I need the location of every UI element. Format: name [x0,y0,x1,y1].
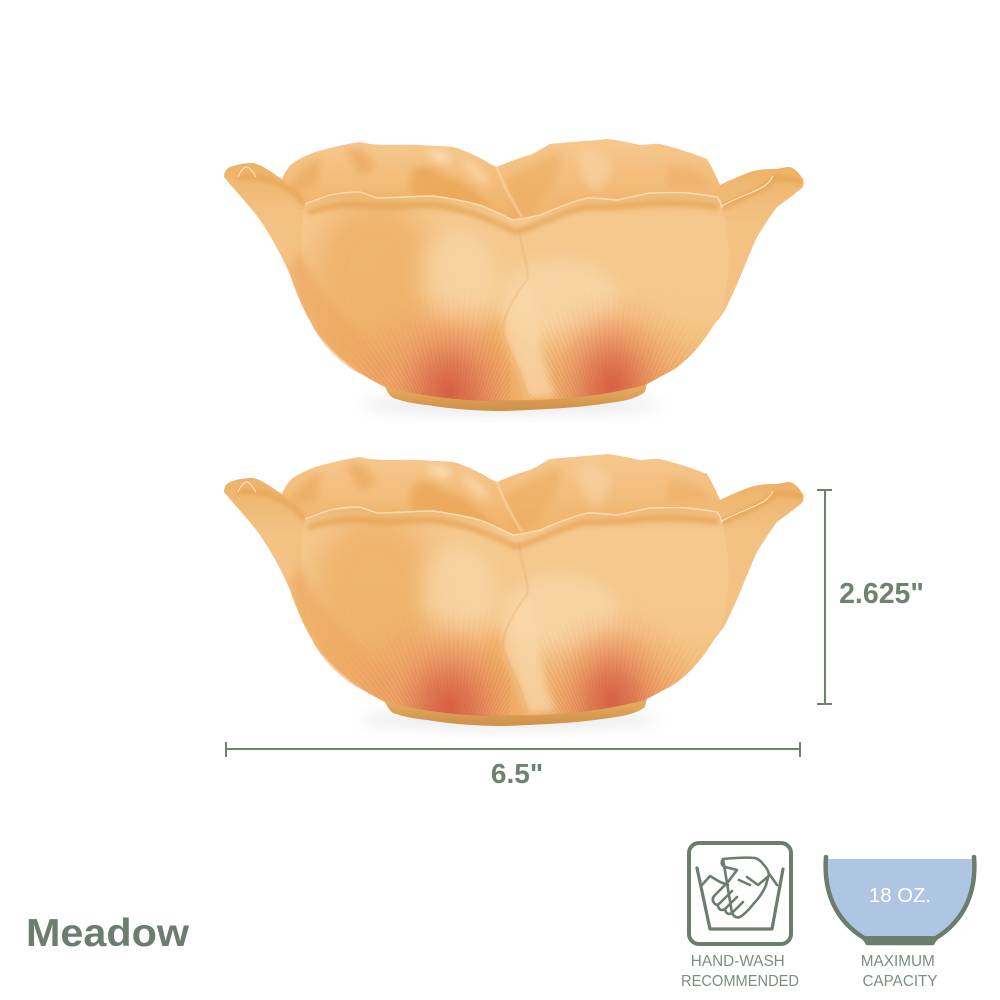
label: capacity: CAPACITY [862,973,938,990]
icon: hand-wash [689,843,791,944]
capacity fill [826,859,974,938]
label: hand-wash: RECOMMENDED [681,973,799,990]
bowl: bottom [224,454,803,900]
icon: capacity bowl [826,857,974,945]
label: hand-wash: HAND-WASH [691,953,785,970]
width label: 6.5" [491,758,543,789]
height label: 2.625" [839,578,924,610]
bowl image: bottom [224,454,803,900]
width dimension bracket [226,742,800,757]
label: capacity: MAXIMUM [861,953,935,970]
capacity outline [826,857,974,943]
capacity foot [862,936,938,945]
capacity value: 18 OZ. [869,885,931,907]
bowl image: top [224,139,803,585]
collection name: Meadow [26,912,190,955]
bowl shadow: top [360,395,660,415]
bowl: top [224,139,803,585]
height dimension bracket [817,490,832,704]
bowl shadow: bottom [360,710,660,730]
